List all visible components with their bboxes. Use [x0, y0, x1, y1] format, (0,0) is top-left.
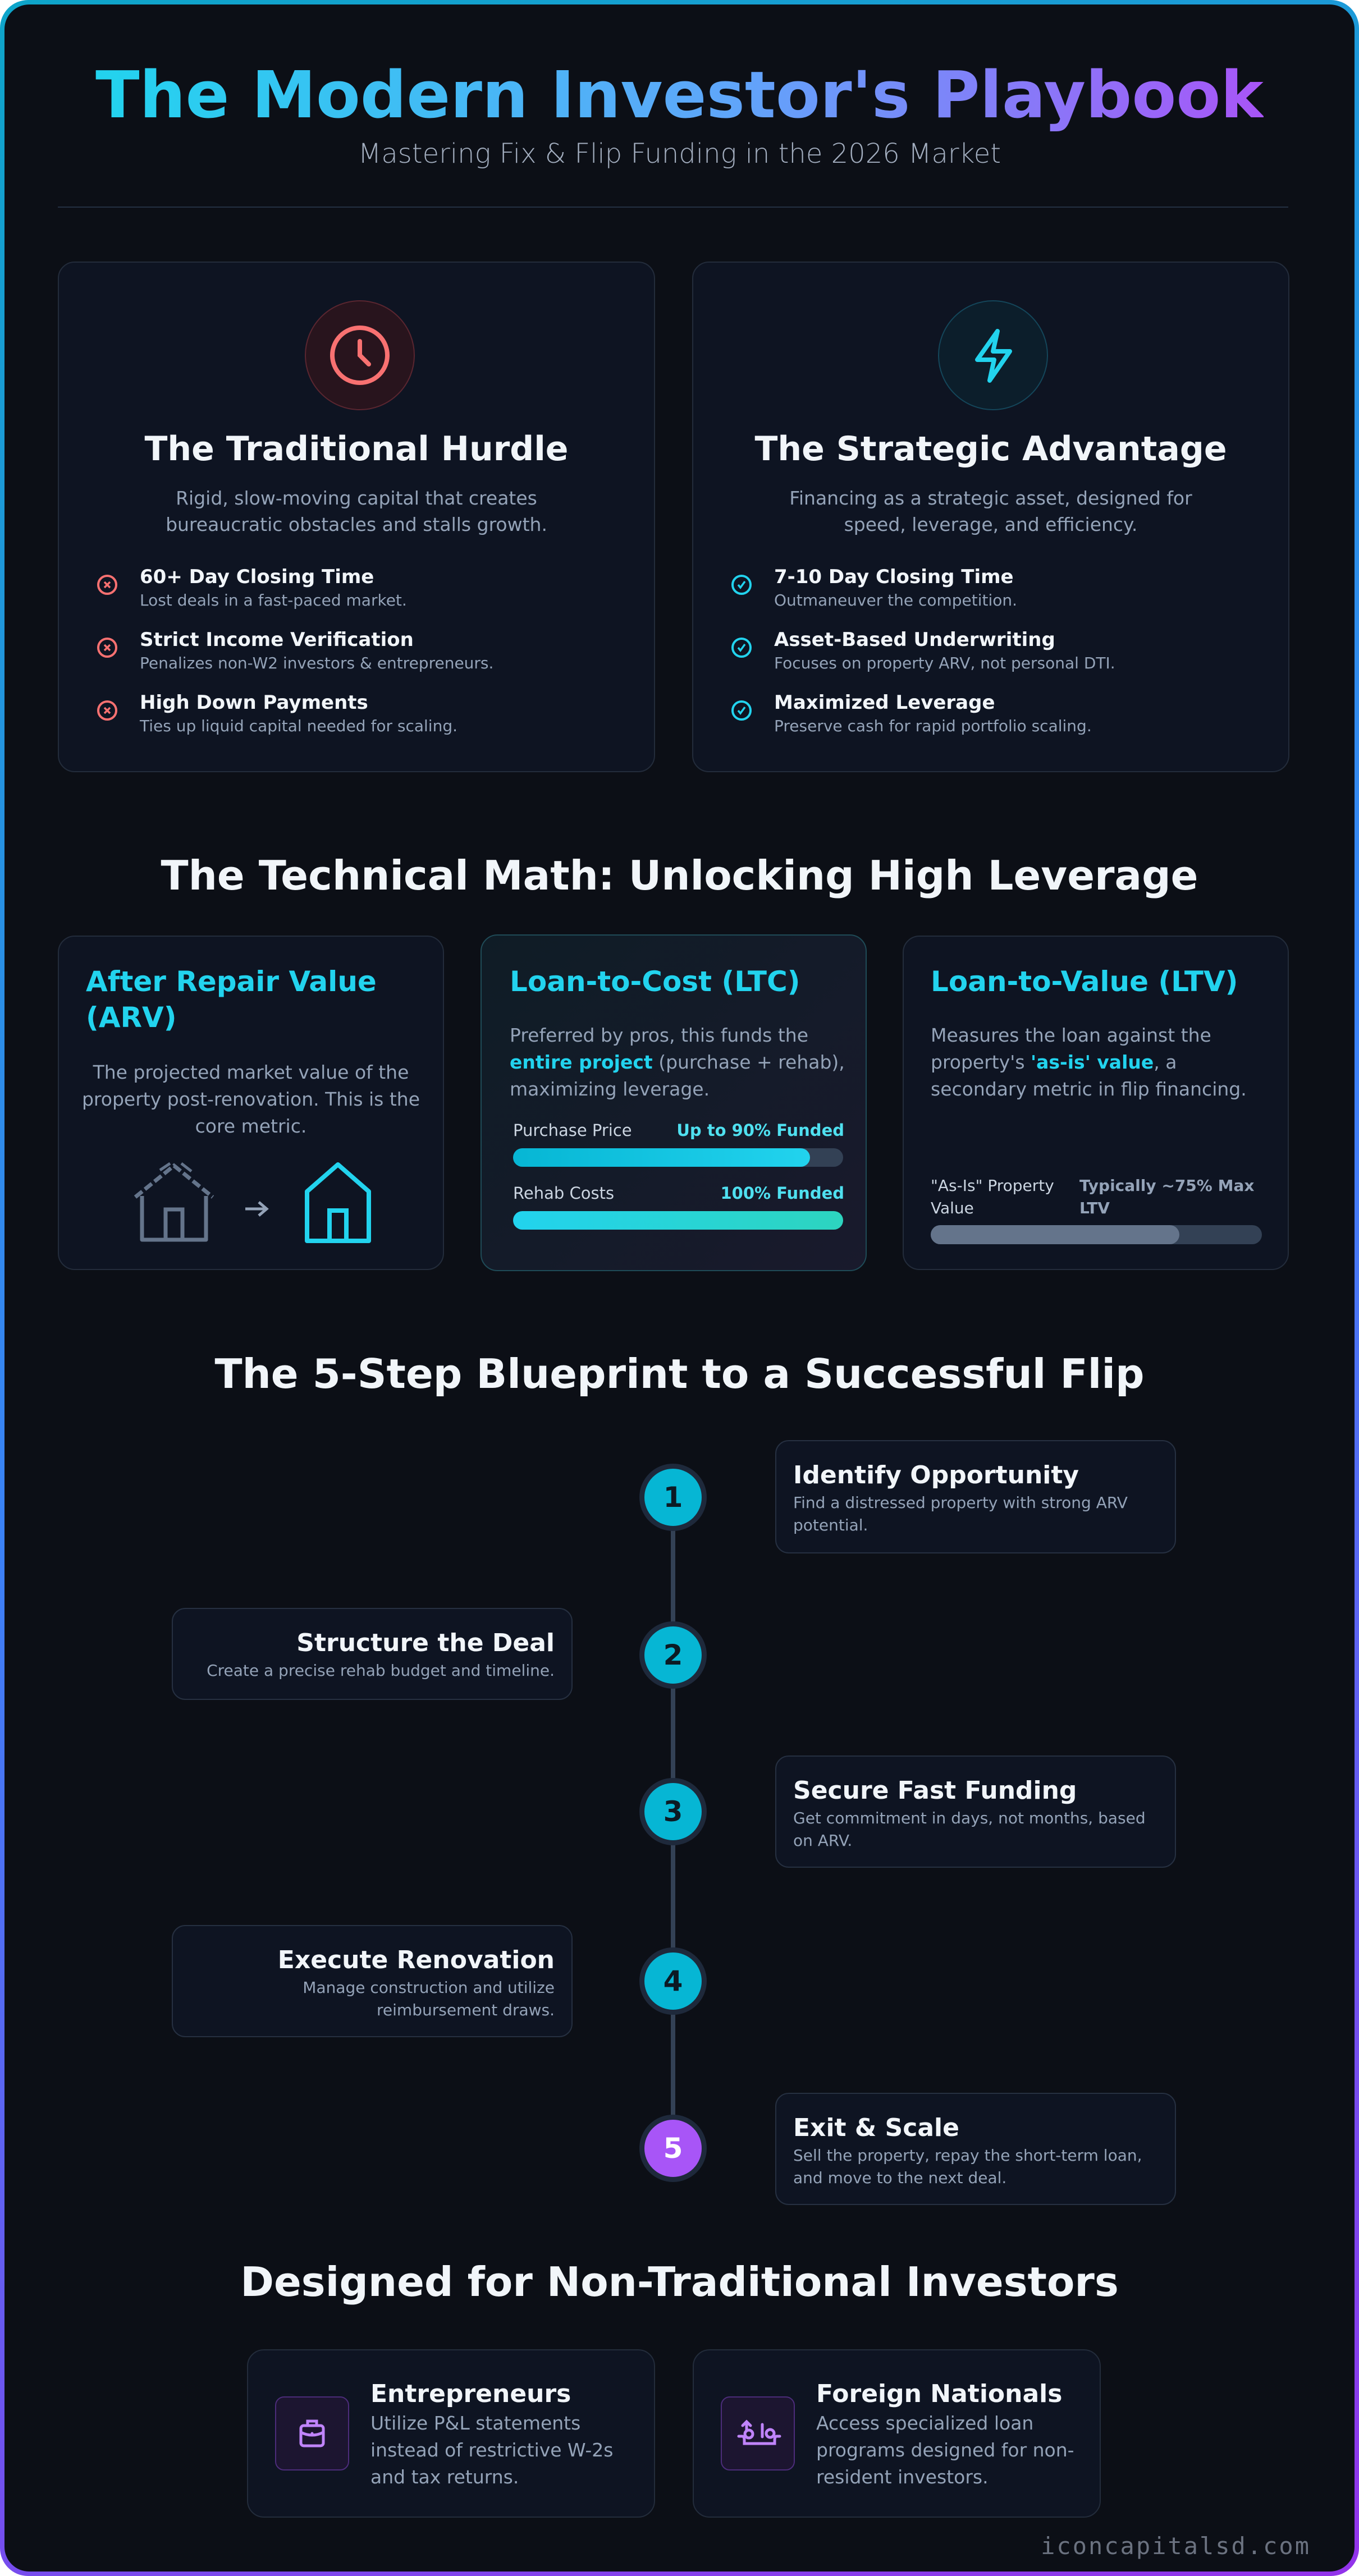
LTV description: property's 'as-is' value, a: [931, 1051, 1177, 1073]
LTC title: Loan-to-Cost (LTC): [510, 965, 800, 998]
description: speed, leverage, and efficiency.: [844, 514, 1137, 535]
step 5 card: Exit & Scale: [793, 2114, 959, 2142]
step 1 card: Find a distressed property with strong ARV potential.: [793, 1493, 1128, 1534]
entrepreneurs text: Entrepreneurs: [370, 2380, 571, 2408]
step 1: 1: [664, 1481, 683, 1514]
icon: ship: [721, 2396, 795, 2470]
bar: purchase price: Purchase Price: [513, 1121, 632, 1140]
item 2: Strict Income Verification: [140, 629, 414, 651]
bar: as-is value: "As-Is" Property: [931, 1176, 1054, 1195]
LTC description: entire project (purchase + rehab),: [510, 1051, 845, 1073]
foreign nationals text: [816, 2378, 1086, 2491]
list: [731, 566, 1115, 735]
step 4 card: Manage construction and utilize: [303, 1978, 555, 1997]
step 5: [639, 2115, 707, 2182]
step 2 card: Create a precise rehab budget and timeline.: [207, 1661, 555, 1680]
description: [789, 487, 1192, 535]
step 3 card: Get commitment in days, not months, based on ARV.: [793, 1809, 1146, 1850]
item 1: 7-10 Day Closing Time: [774, 566, 1014, 588]
step 4: 4: [664, 1965, 683, 1997]
ARV description: [82, 1061, 420, 1137]
item 2: [731, 629, 1115, 672]
step 4 card: reimbursement draws.: [377, 2001, 555, 2019]
step 3 card: Secure Fast Funding: [793, 1776, 1077, 1805]
ARV title: [86, 965, 377, 1034]
step 2: [639, 1621, 707, 1689]
step 5: 5: [664, 2132, 683, 2165]
step 3: 3: [664, 1795, 683, 1828]
item 3: Maximized Leverage: [774, 691, 995, 714]
bar: as-is value: LTV: [1079, 1199, 1110, 1217]
item 3: Ties up liquid capital needed for scaling.: [140, 717, 457, 735]
LTC description: [510, 1024, 845, 1100]
foreign nationals text: Foreign Nationals: [816, 2380, 1062, 2408]
step 3 card: [775, 1755, 1176, 1868]
step 1 card: Identify Opportunity: [793, 1461, 1079, 1489]
panel: strategic advantage: [692, 262, 1289, 772]
list: [97, 566, 493, 735]
LTC description: Preferred by pros, this funds the: [510, 1024, 808, 1046]
item 2: Penalizes non-W2 investors & entrepreneurs.: [140, 654, 493, 672]
item 3: Preserve cash for rapid portfolio scaling.: [774, 717, 1092, 735]
step 5 card: Sell the property, repay the short-term loan, and move to the next deal.: [793, 2146, 1142, 2187]
heading: technical math: The Technical Math: Unlocking High Leverage: [161, 852, 1198, 899]
item 1: 60+ Day Closing Time: [140, 566, 374, 588]
bar: as-is value: Value: [931, 1199, 974, 1217]
panel: LTV: [903, 936, 1289, 1270]
LTV description: [931, 1024, 1247, 1100]
panel: traditional hurdle: [58, 262, 655, 772]
icon: clock: [305, 300, 415, 410]
title: The Modern Investor's Playbook: [95, 58, 1264, 133]
item 1: [97, 566, 407, 609]
description: Financing as a strategic asset, designed for: [789, 487, 1192, 509]
bar: purchase price: [513, 1121, 844, 1167]
step 2: 2: [664, 1639, 683, 1671]
item 3: [97, 691, 457, 735]
entrepreneurs text: [370, 2378, 640, 2491]
heading: non-traditional investors: Designed for Non-Traditional Investors: [240, 2258, 1119, 2305]
item 1: [731, 566, 1017, 609]
item 3: [731, 691, 1092, 735]
heading: 5-step blueprint: The 5-Step Blueprint to a Successful Flip: [214, 1350, 1145, 1397]
icon: houses: [134, 1162, 371, 1243]
LTV title: Loan-to-Value (LTV): [931, 965, 1238, 998]
ARV title: After Repair Value: [86, 965, 377, 998]
bar: as-is value: [931, 1169, 1263, 1248]
panel: ARV: [58, 936, 444, 1270]
entrepreneurs text: Utilize P&L statements instead of restrictive W-2s and tax returns.: [370, 2412, 613, 2488]
step 1: [639, 1464, 707, 1531]
ARV description: property post-renovation. This is the: [82, 1088, 420, 1110]
item 2: Asset-Based Underwriting: [774, 629, 1055, 651]
bar: rehab costs: 100% Funded: [720, 1184, 844, 1203]
bar: as-is value: Typically ~75% Max: [1079, 1176, 1254, 1195]
ARV title: (ARV): [86, 1001, 177, 1034]
item 1: Outmaneuver the competition.: [774, 591, 1017, 609]
heading: The Strategic Advantage: [754, 429, 1227, 469]
subtitle: Mastering Fix & Flip Funding in the 2026 Market: [358, 138, 1001, 169]
description: [166, 487, 547, 535]
bar: purchase price: Up to 90% Funded: [676, 1121, 844, 1140]
description: Rigid, slow-moving capital that creates: [176, 487, 537, 509]
item 3: High Down Payments: [140, 691, 368, 714]
heading: The Traditional Hurdle: [144, 429, 568, 469]
description: bureaucratic obstacles and stalls growth.: [166, 514, 547, 535]
item 1: Lost deals in a fast-paced market.: [140, 591, 407, 609]
step 2 card: [172, 1608, 573, 1700]
ARV description: The projected market value of the: [93, 1061, 409, 1083]
step 4 card: Execute Renovation: [278, 1946, 555, 1974]
LTV description: Measures the loan against the: [931, 1024, 1211, 1046]
item 2: Focuses on property ARV, not personal DTI.: [774, 654, 1115, 672]
timeline: [4, 1464, 1355, 2216]
LTV description: secondary metric in flip financing.: [931, 1078, 1247, 1100]
step 5 card: [775, 2093, 1176, 2205]
LTC description: maximizing leverage.: [510, 1078, 710, 1100]
step 2 card: Structure the Deal: [296, 1629, 555, 1657]
step 1 card: [775, 1440, 1176, 1553]
step 4: [639, 1947, 707, 2015]
bar: rehab costs: [513, 1184, 844, 1230]
bar: rehab costs: Rehab Costs: [513, 1184, 614, 1203]
footer: website: iconcapitalsd.com: [1041, 2532, 1311, 2560]
icon: lightning: [938, 300, 1048, 410]
step 4 card: [172, 1925, 573, 2037]
step 3: [639, 1778, 707, 1845]
panel: LTC: [481, 934, 867, 1271]
panel: foreign nationals: [693, 2349, 1101, 2518]
ARV description: core metric.: [195, 1115, 306, 1137]
foreign nationals text: Access specialized loan programs designed for non-resident investors.: [816, 2412, 1074, 2488]
icon: briefcase: [275, 2396, 349, 2470]
panel: entrepreneurs: [247, 2349, 655, 2518]
item 2: [97, 629, 493, 672]
